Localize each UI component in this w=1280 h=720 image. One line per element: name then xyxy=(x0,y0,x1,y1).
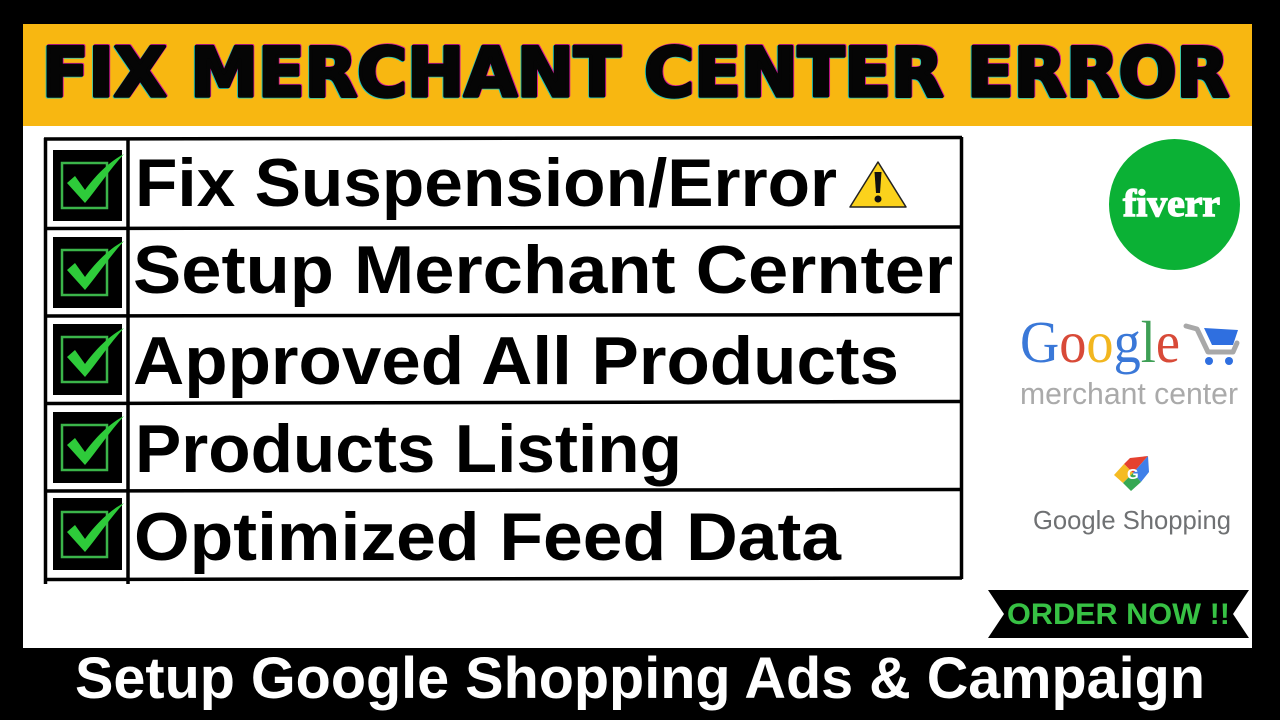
fiverr logo: fiverr xyxy=(1123,183,1220,225)
icon: check box 2 xyxy=(53,237,124,308)
order now ribbon: ORDER NOW !! xyxy=(1007,598,1230,631)
icon: check box 5 xyxy=(53,498,124,570)
fiverr logo xyxy=(1109,139,1240,270)
row 5: optimized feed data: Optimized Feed Data xyxy=(134,499,842,575)
title banner: FIX MERCHANT CENTER ERROR xyxy=(43,33,1230,112)
google merchant center logo: merchant center xyxy=(1020,376,1238,411)
checklist table xyxy=(44,137,962,584)
icon: shopping cart xyxy=(1186,326,1238,365)
row 2: setup merchant center: Setup Merchant Cernter xyxy=(133,232,953,308)
row 3: approved all products: Approved All Products xyxy=(133,323,899,399)
icon: check box 3 xyxy=(53,324,124,395)
google shopping logo xyxy=(1033,456,1231,535)
google shopping logo: Google Shopping xyxy=(1033,505,1231,535)
row 4: products listing: Products Listing xyxy=(135,411,682,487)
icon: shopping tag: G xyxy=(1127,466,1139,483)
row 1: fix suspension: Fix Suspension/Error xyxy=(135,145,837,221)
icon: warning triangle xyxy=(850,162,906,207)
title banner: FIX MERCHANT CENTER ERROR xyxy=(41,35,1228,114)
google wordmark: Google xyxy=(1020,309,1180,375)
google merchant center logo xyxy=(1020,309,1238,411)
order now ribbon xyxy=(988,590,1249,638)
table grid lines xyxy=(44,137,962,584)
icon: check box 4 xyxy=(53,412,124,483)
icon: shopping tag xyxy=(1114,456,1149,491)
title banner: FIX MERCHANT CENTER ERROR xyxy=(42,34,1229,113)
footer tagline: Setup Google Shopping Ads & Campaign xyxy=(75,646,1205,711)
icon: check box 1 xyxy=(53,150,124,221)
